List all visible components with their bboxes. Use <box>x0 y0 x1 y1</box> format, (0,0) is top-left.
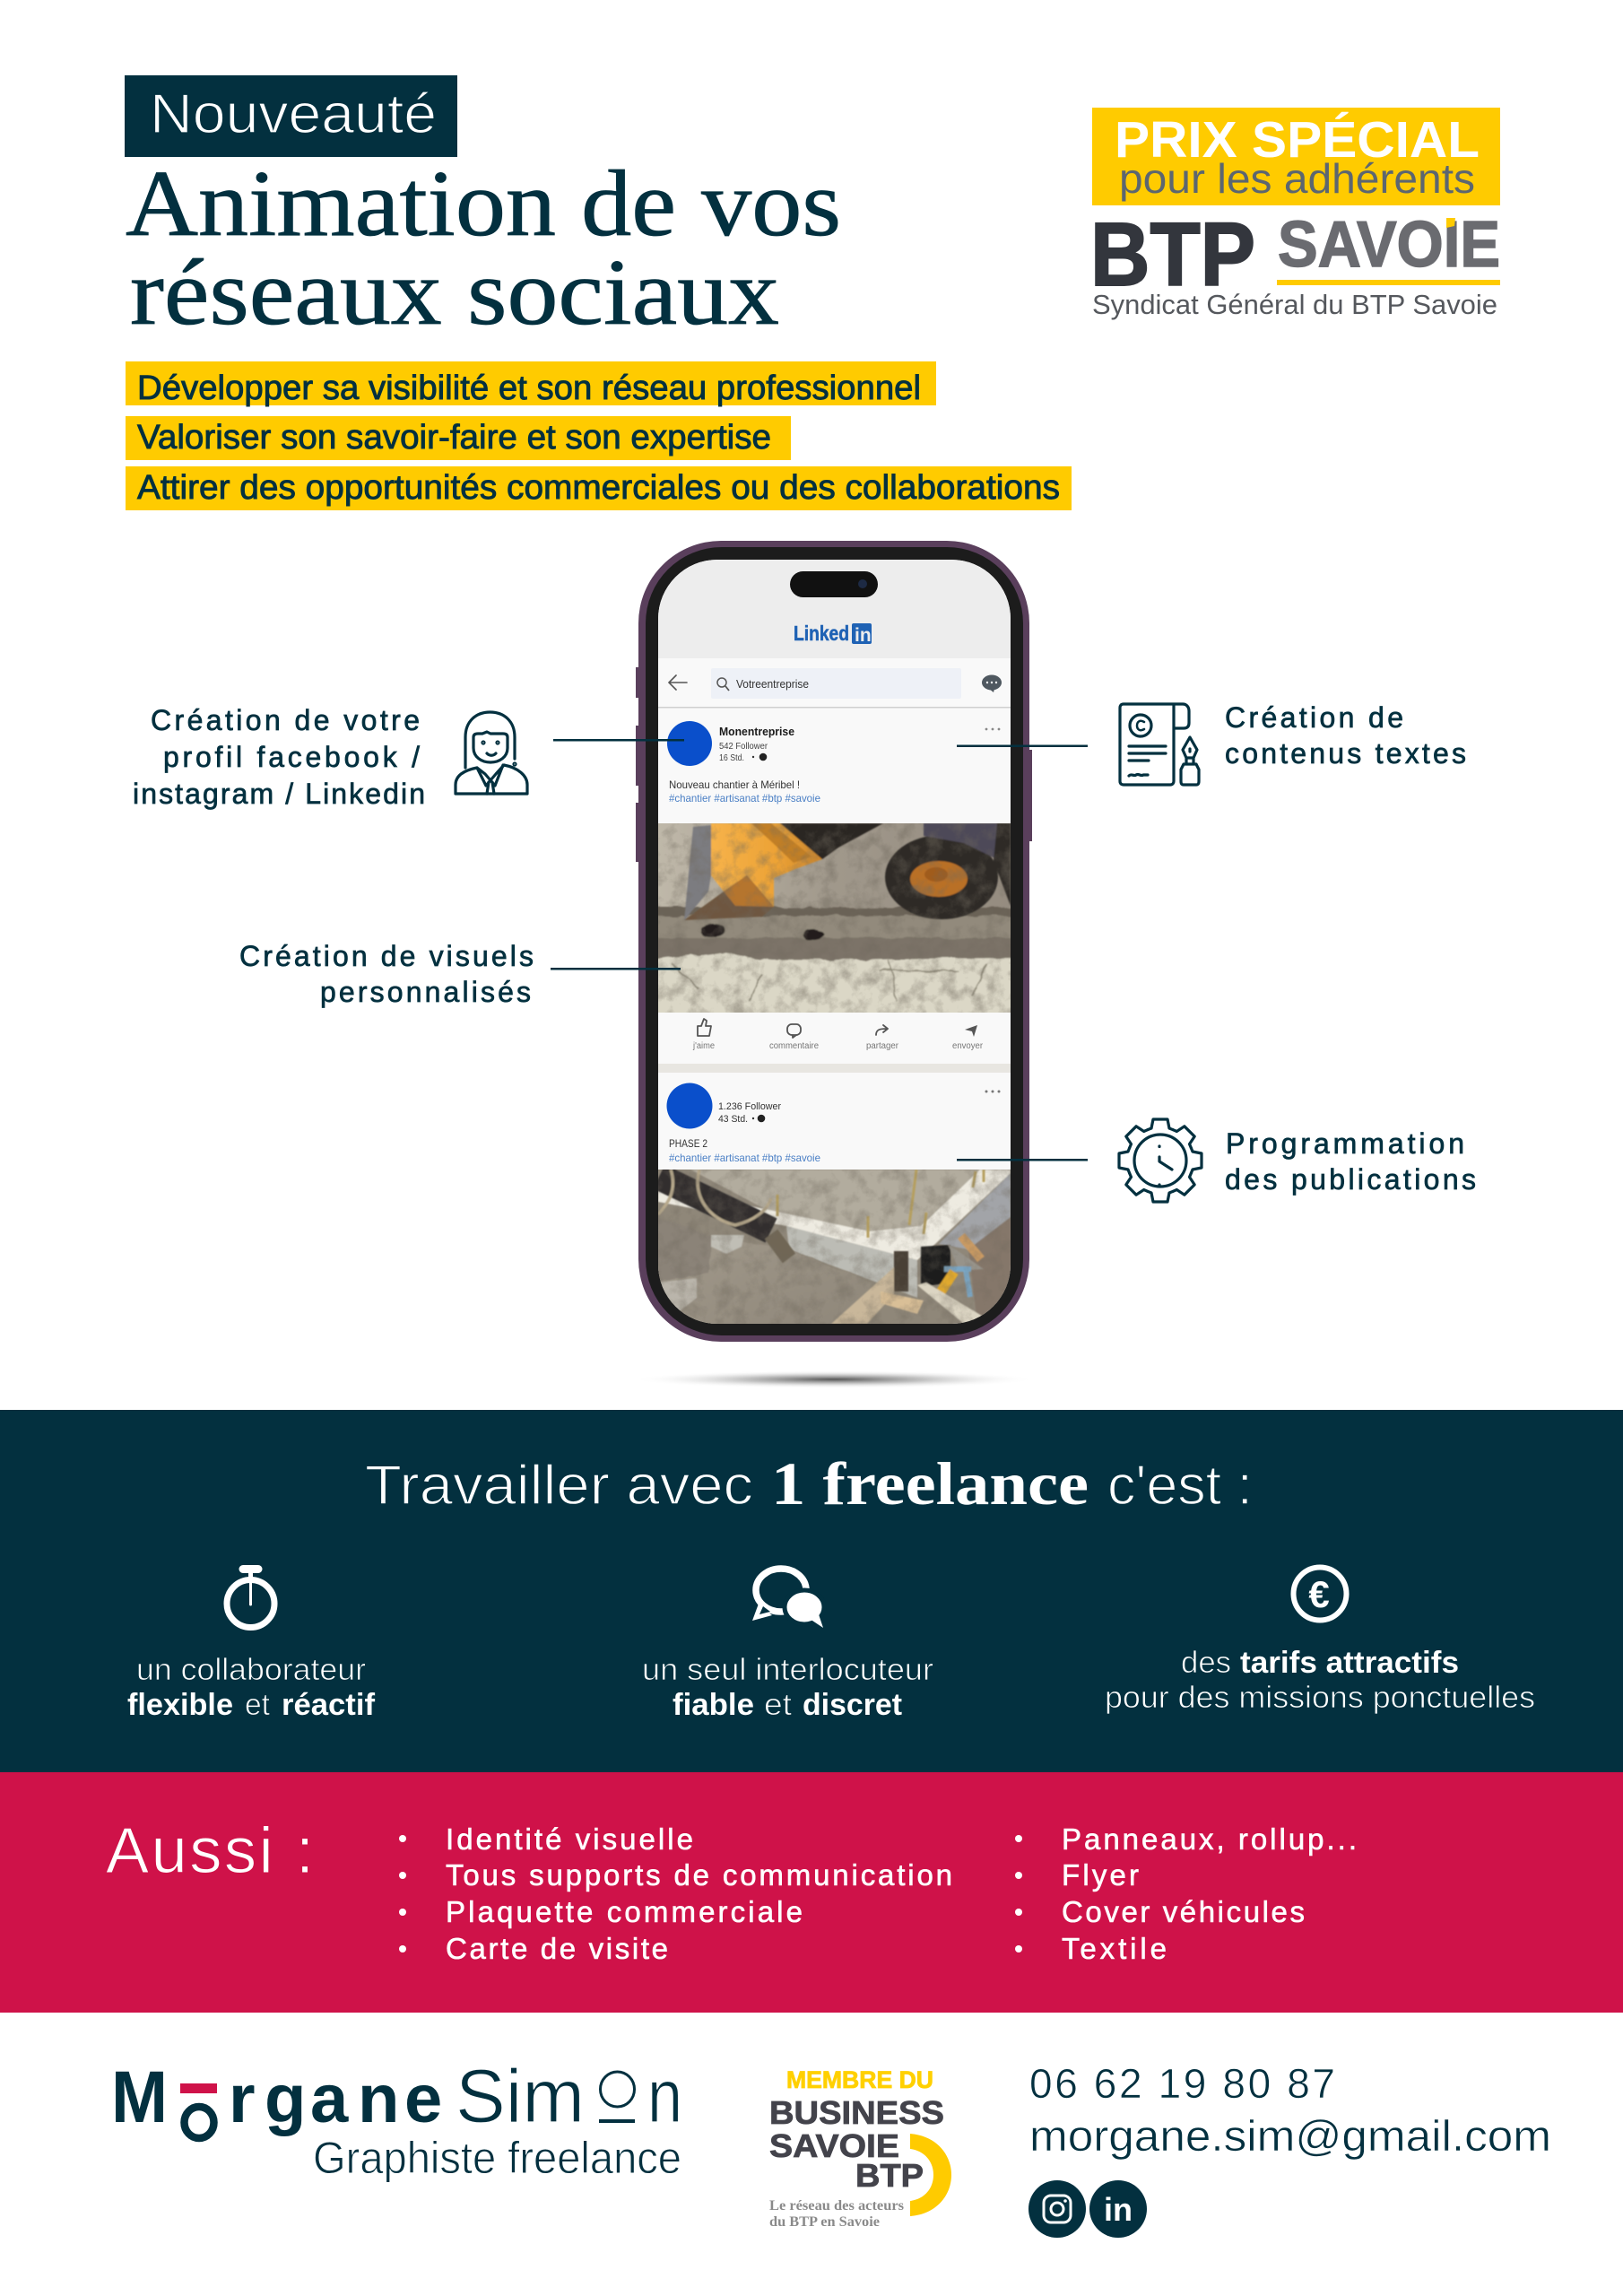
share: partager <box>866 1041 899 1051</box>
search bar <box>658 668 1011 709</box>
connector line <box>957 1159 1088 1161</box>
advantage: pricing: tarifs attractifs <box>1240 1646 1459 1680</box>
phone screen <box>650 560 1018 1336</box>
post 1 header <box>667 721 1000 804</box>
callout text: Création de <box>1225 701 1403 734</box>
tools and timber <box>921 1245 950 1287</box>
wheel <box>885 835 998 919</box>
list: column 1 <box>399 1822 952 1965</box>
benefit 2: Valoriser son savoir-faire et son expertise <box>137 419 771 457</box>
send <box>952 1025 984 1051</box>
icon: chat bubbles <box>752 1569 824 1628</box>
callout text <box>133 704 425 810</box>
icon: instagram <box>1028 2180 1086 2238</box>
logo: Morgane Simon: rgane <box>229 2061 442 2137</box>
hose <box>659 1177 771 1231</box>
badge: Nouveauté: Nouveauté <box>150 83 437 145</box>
badge: Nouveauté <box>125 75 457 157</box>
post 1 header: 16 Std. <box>719 753 744 763</box>
callout text: personnalisés <box>320 976 531 1008</box>
callout: profile creation <box>133 704 684 810</box>
logo: Morgane Simon: Graphiste freelance <box>313 2133 681 2183</box>
title: réseaux sociaux <box>130 239 779 344</box>
callout text <box>1225 1127 1476 1196</box>
list: column 1: Carte de visite <box>446 1932 668 1965</box>
advantage: single contact: discret <box>803 1688 902 1722</box>
logo: Morgane Simon <box>111 2054 682 2183</box>
list: column 2: Textile <box>1062 1932 1167 1965</box>
list: column 1: Plaquette commerciale <box>446 1895 803 1928</box>
callout text: instagram / Linkedin <box>133 778 425 810</box>
heading: c'est : <box>1107 1455 1253 1517</box>
title <box>126 151 841 344</box>
callout text: des publications <box>1225 1163 1476 1196</box>
photo: excavator on concrete <box>658 823 1011 1013</box>
comment <box>769 1024 819 1051</box>
advantage: pricing: pour des missions ponctuelles <box>1105 1681 1535 1715</box>
post 2 header: PHASE 2 <box>669 1137 707 1150</box>
panel: freelance advantages <box>0 1410 1623 1772</box>
linkedin logo: Linked <box>794 622 849 645</box>
callout text: profil facebook / <box>163 741 420 773</box>
advantage: single contact: et <box>764 1688 793 1722</box>
post 1 header: #chantier #artisanat #btp #savoie <box>669 792 820 804</box>
callout: visuals creation <box>239 940 681 1008</box>
bucket <box>684 825 711 920</box>
logo: Business Savoie BTP: SAVOIE <box>769 2127 899 2164</box>
logo: Business Savoie BTP <box>769 2066 951 2230</box>
advantage: pricing: des <box>1181 1646 1231 1680</box>
logo: BTP Savoie: Syndicat Général du BTP Savoie <box>1092 289 1497 320</box>
logo: Morgane Simon: M <box>111 2057 168 2138</box>
icon: euro coin <box>1293 1568 1347 1620</box>
connector line <box>957 744 1088 747</box>
logo: Business Savoie BTP: BTP <box>855 2157 924 2194</box>
advantage: single contact <box>642 1569 933 1722</box>
heading: 1 freelance <box>771 1449 1089 1518</box>
phone side buttons <box>636 667 1032 862</box>
callout text: Création de visuels <box>239 940 534 972</box>
comment: commentaire <box>769 1041 819 1051</box>
list: column 1: Tous supports de communication <box>446 1858 952 1892</box>
connector line <box>551 968 681 970</box>
advantage: pricing <box>1105 1568 1535 1715</box>
advantage: flexible: et <box>245 1688 271 1722</box>
advantage: single contact: un seul interlocuteur <box>642 1653 933 1687</box>
icon: document and pen <box>1120 704 1199 785</box>
logo: Morgane Simon: n <box>647 2054 682 2138</box>
heading: Travailler avec <box>365 1455 753 1517</box>
icon: gear with clock <box>1119 1119 1202 1202</box>
post 2 header <box>667 1083 1001 1164</box>
callout text: Programmation <box>1226 1127 1464 1160</box>
contact details: 06 62 19 80 87 <box>1029 2060 1335 2107</box>
list: column 2: Panneaux, rollup... <box>1062 1822 1357 1856</box>
camera island <box>790 571 878 597</box>
like <box>692 1019 715 1051</box>
post 1 header: Nouveau chantier à Méribel ! <box>669 778 800 791</box>
contact details: morgane.sim@gmail.com <box>1029 2113 1551 2161</box>
callout: scheduling <box>957 1119 1476 1202</box>
share <box>866 1025 899 1051</box>
callout text: contenus textes <box>1225 737 1466 770</box>
send: envoyer <box>952 1041 984 1051</box>
benefit 3: Attirer des opportunités commerciales ou des collaborations <box>137 469 1060 507</box>
icon: linkedin: in <box>1104 2191 1133 2228</box>
heading: Aussi: Aussi : <box>106 1815 314 1887</box>
contact details <box>1028 2060 1551 2238</box>
advantage: flexible: un collaborateur <box>136 1653 366 1687</box>
icon: linkedin <box>1089 2180 1147 2238</box>
list: column 2 <box>1015 1822 1357 1965</box>
icon: woman profile <box>456 712 527 794</box>
post 2 header: 1.236 Follower <box>718 1101 781 1112</box>
list: column 2: Cover véhicules <box>1062 1895 1305 1928</box>
phone body <box>638 541 1029 1342</box>
advantage: flexible <box>127 1570 376 1722</box>
linkedin logo: in <box>855 625 872 646</box>
title: Animation de vos <box>126 151 841 256</box>
special price badge: PRIX SPÉCIAL <box>1115 111 1480 169</box>
like: j'aime <box>692 1041 715 1051</box>
benefit 1: Développer sa visibilité et son réseau professionnel <box>137 370 921 407</box>
photo: concrete pouring <box>650 1170 1011 1336</box>
logo: BTP Savoie <box>1090 204 1500 320</box>
post 1 header: 542 Follower <box>719 742 768 752</box>
post 1 actions <box>692 1019 984 1051</box>
list: column 2: Flyer <box>1062 1858 1139 1892</box>
callout text <box>239 940 534 1008</box>
logo: Business Savoie BTP: du BTP en Savoie <box>769 2214 880 2230</box>
logo: Business Savoie BTP: BUSINESS <box>769 2094 944 2131</box>
callout: text content <box>957 701 1466 785</box>
logo: Business Savoie BTP: Le réseau des acteurs <box>769 2198 904 2213</box>
logo: Business Savoie BTP: MEMBRE DU <box>786 2066 933 2093</box>
callout text <box>1225 701 1466 770</box>
app header <box>658 560 1011 658</box>
connector line <box>553 739 684 741</box>
logo: BTP Savoie: SAVOIE <box>1278 209 1500 281</box>
heading <box>365 1449 1253 1518</box>
search bar: Votreentreprise <box>736 677 809 691</box>
logo: BTP Savoie: BTP <box>1090 204 1255 305</box>
advantage: flexible: flexible <box>127 1688 233 1722</box>
post 1 header: Monentreprise <box>719 726 794 738</box>
list: column 1: Identité visuelle <box>446 1822 693 1856</box>
advantage: single contact: fiable <box>673 1688 754 1722</box>
advantage: flexible: réactif <box>282 1688 376 1722</box>
special price badge <box>1092 108 1500 205</box>
icon: euro coin: € <box>1308 1573 1330 1615</box>
panel: other services <box>0 1772 1623 2013</box>
callout text: Création de votre <box>151 704 420 736</box>
post 2 header: 43 Std. <box>718 1114 748 1125</box>
post 2 header: #chantier #artisanat #btp #savoie <box>669 1152 820 1164</box>
highlighted benefits <box>126 361 1072 510</box>
phone mockup <box>632 541 1036 1388</box>
special price badge: pour les adhérents <box>1119 155 1475 202</box>
icon: stopwatch <box>227 1570 274 1627</box>
phone shadow <box>632 1370 1036 1388</box>
rods <box>777 1170 984 1238</box>
logo: Morgane Simon: Sim <box>456 2054 585 2138</box>
